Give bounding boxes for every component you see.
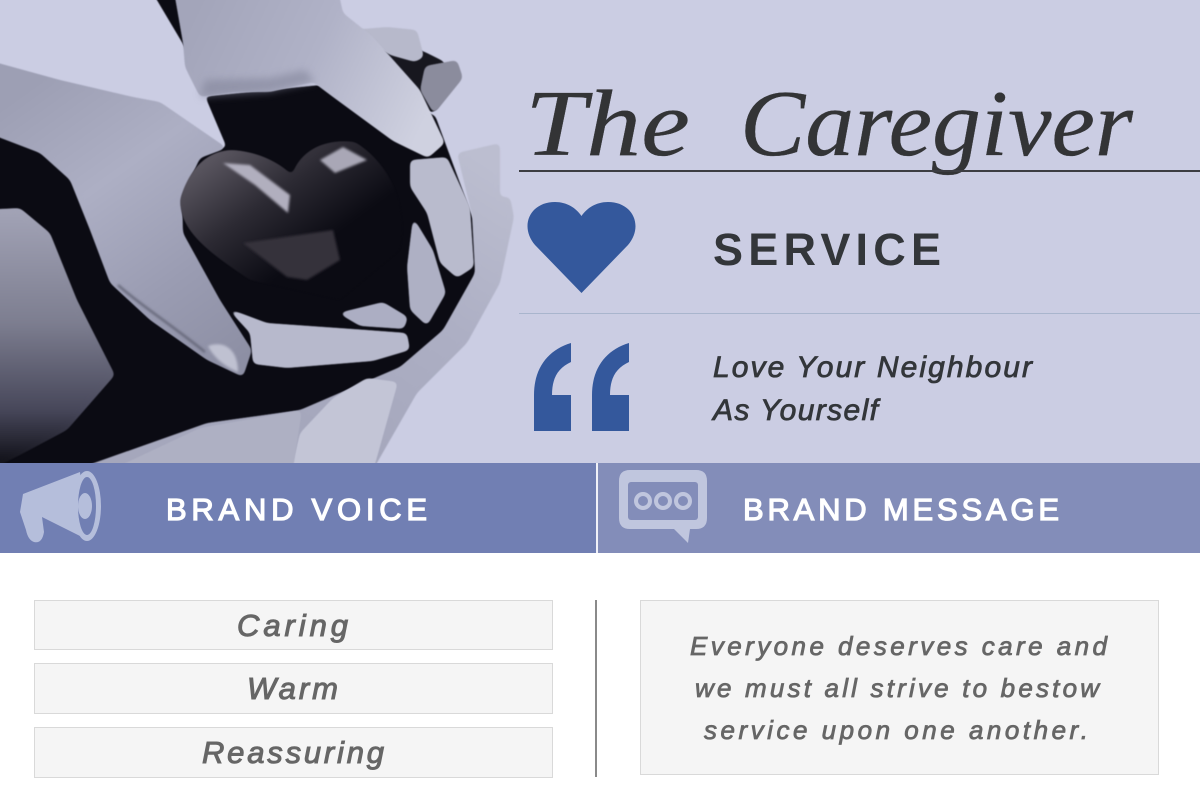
title rule — [519, 170, 1200, 172]
panel: brand voice traits — [34, 600, 552, 778]
icon: heart — [528, 202, 635, 293]
heart body — [180, 141, 402, 300]
thumb nail — [208, 344, 238, 372]
upper hand — [172, 0, 445, 158]
band: brand message — [598, 463, 1200, 553]
photo: hands cradling a heart — [0, 0, 514, 475]
upper hand shading — [200, 70, 315, 97]
dark shadow mass — [0, 0, 490, 475]
right hand — [60, 143, 514, 475]
right fingers — [410, 157, 474, 278]
title: The — [525, 72, 690, 176]
band: brand voice — [0, 463, 596, 553]
bottom thumb — [290, 378, 398, 475]
quote text: Love Your Neighbour — [713, 351, 1033, 384]
panel: brand message text: we must all strive to bestow — [695, 673, 1101, 703]
white lower panel — [0, 553, 1200, 808]
left palm — [0, 58, 252, 377]
quote text: As Yourself — [711, 394, 881, 427]
background panel — [0, 0, 1200, 463]
trait: caring: Caring — [237, 608, 348, 643]
icon: megaphone — [20, 471, 101, 542]
label: brand message: BRAND MESSAGE — [743, 492, 1059, 527]
panel: brand message text: Everyone deserves care and — [690, 631, 1109, 661]
label: brand voice: BRAND VOICE — [166, 492, 427, 527]
heart reflections — [223, 163, 290, 213]
trait: reassuring — [34, 728, 552, 778]
quote text — [711, 351, 1033, 427]
bottom fingers — [100, 410, 302, 475]
small fingers — [227, 308, 410, 368]
title — [525, 72, 1133, 176]
palm crease — [118, 285, 205, 352]
icon: quotation marks — [534, 343, 629, 431]
icon: speech bubble — [619, 470, 707, 543]
trait: warm — [34, 664, 552, 714]
trait: reassuring: Reassuring — [202, 735, 384, 770]
panel: brand message text — [640, 600, 1158, 774]
trait: warm: Warm — [247, 671, 338, 706]
heading: service: SERVICE — [713, 224, 941, 275]
back finger shadow — [365, 30, 445, 114]
title: Caregiver — [740, 72, 1133, 176]
lower left hand — [0, 208, 115, 475]
trait: caring — [34, 600, 552, 650]
back fingers — [350, 27, 424, 62]
panel: brand message text: service upon one another. — [704, 715, 1088, 745]
